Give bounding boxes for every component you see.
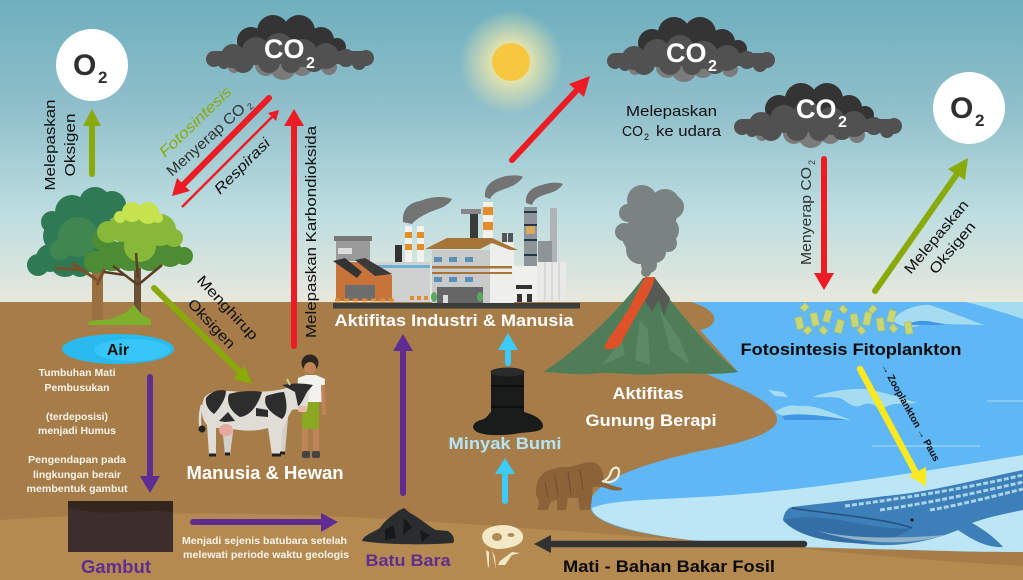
label: melepaskan oksigen left: Melepaskan — [43, 100, 59, 190]
label: respirasi: Respirasi — [212, 135, 274, 198]
label: menyerap CO2: 2 — [245, 101, 256, 112]
cloud CO2 right: CO — [796, 94, 836, 124]
coal pile — [362, 508, 454, 544]
arrow: oxygen up left — [83, 109, 101, 174]
lower ground layer — [0, 514, 1023, 580]
arrow: menyerap CO2 to sea — [814, 159, 834, 290]
ice floes — [768, 302, 1023, 420]
sun — [459, 10, 563, 114]
arrow: oil to industry — [498, 333, 518, 363]
O2 circle left: 2 — [98, 68, 107, 87]
person — [297, 354, 325, 458]
peat block — [68, 501, 173, 552]
oil barrel with spill — [473, 368, 543, 435]
trees — [27, 187, 193, 325]
text: decomposition stages: menjadi Humus — [38, 425, 116, 437]
cloud CO2 left: 2 — [306, 55, 315, 72]
arrow: yellow food chain — [860, 369, 926, 486]
arrow: menyerap CO2 — [172, 98, 269, 196]
O2 circle left — [56, 29, 128, 101]
water pond: Air — [107, 342, 129, 359]
arrow: respirasi — [182, 110, 279, 207]
smoke — [615, 185, 684, 277]
text: geological time: melewati periode waktu geologis — [183, 549, 349, 561]
cow — [198, 379, 313, 455]
water pond — [62, 334, 174, 364]
label: fotosintesis fitoplankton: Fotosintesis Fitoplankton — [740, 340, 962, 359]
O2 circle right — [933, 72, 1005, 144]
ground — [0, 302, 1023, 580]
dark soil wedge — [790, 547, 1023, 566]
label: menghirup oksigen — [184, 273, 261, 352]
label: menghirup oksigen: Oksigen — [184, 296, 238, 352]
arrow: purple down to gambut — [140, 377, 160, 493]
label: fotosintesis: Fotosintesis — [156, 83, 236, 161]
cloud CO2 middle — [607, 17, 775, 82]
label: manusia dan hewan: Manusia & Hewan — [186, 463, 344, 483]
label: melepaskan CO2 ke udara — [622, 104, 722, 142]
text: decomposition stages: Pengendapan pada — [28, 454, 126, 466]
cloud CO2 right — [734, 83, 902, 148]
arrow: purple gambut to coal — [193, 513, 338, 532]
phytoplankton — [795, 303, 913, 335]
O2 circle left: O — [73, 49, 96, 82]
label: zooplankton paus: → Zooplankton → Paus — [878, 362, 942, 464]
arrow: menghirup oksigen — [154, 288, 252, 384]
mammoth — [536, 462, 622, 510]
text: decomposition stages: membentuk gambut — [26, 483, 128, 495]
arrow: industry to cloud — [512, 76, 590, 160]
label: batu bara: Batu Bara — [366, 551, 451, 570]
text: geological time: Menjadi sejenis batubara setelah — [182, 535, 347, 547]
label: melepaskan CO2 ke udara: CO — [622, 124, 643, 140]
arrow: fossil to oil — [495, 458, 515, 501]
label: menyerap CO2 right: 2 — [807, 160, 817, 165]
cloud CO2 middle: 2 — [708, 58, 717, 75]
label: gambut: Gambut — [81, 557, 151, 577]
text: decomposition stages — [26, 367, 128, 495]
label: melepaskan karbondioksida: Melepaskan Karbondioksida — [304, 125, 320, 338]
whale — [783, 470, 1023, 547]
arrow: coal to industry — [393, 334, 413, 493]
fossil — [482, 525, 523, 569]
label: mati bahan bakar fosil: Mati - Bahan Bakar Fosil — [563, 557, 775, 576]
text: decomposition stages: Pembusukan — [44, 382, 110, 394]
label: melepaskan oksigen right: Oksigen — [927, 219, 979, 278]
label: melepaskan CO2 ke udara: ke udara — [656, 124, 722, 140]
label: melepaskan oksigen left — [43, 100, 79, 190]
smoke — [403, 175, 563, 224]
cloud CO2 left — [206, 15, 374, 80]
label: minyak bumi: Minyak Bumi — [448, 434, 562, 453]
cloud CO2 right: 2 — [838, 114, 847, 131]
cloud CO2 left: CO — [264, 34, 304, 64]
label: aktifitas gunung berapi: Gunung Berapi — [586, 411, 716, 430]
text: decomposition stages: lingkungan berair — [33, 469, 121, 481]
label: aktifitas industri: Aktifitas Industri & Manusia — [334, 311, 574, 330]
text: decomposition stages: (terdeposisi) — [46, 411, 108, 423]
label: melepaskan oksigen right: Melepaskan — [902, 197, 972, 277]
arrow: oxygen from sea — [875, 158, 968, 291]
volcano — [543, 185, 738, 374]
O2 circle right: 2 — [975, 111, 984, 130]
O2 circle right: O — [950, 92, 973, 125]
label: menghirup oksigen: Menghirup — [193, 273, 261, 344]
text: decomposition stages: Tumbuhan Mati — [38, 367, 116, 379]
panel: sea — [590, 302, 1023, 553]
text: geological time — [182, 535, 349, 561]
label: aktifitas gunung berapi — [586, 384, 716, 430]
label: melepaskan CO2 ke udara: 2 — [644, 132, 649, 142]
sky background — [0, 0, 1023, 303]
label: menyerap CO2 right: Menyerap CO — [799, 167, 815, 265]
arrow: karbondioksida — [284, 109, 304, 346]
cloud CO2 middle: CO — [666, 38, 706, 68]
arrow: dead to fossil fuel — [534, 535, 804, 553]
waterline highlights — [872, 401, 1023, 446]
factory — [333, 175, 580, 308]
label: aktifitas gunung berapi: Aktifitas — [612, 384, 684, 403]
label: melepaskan CO2 ke udara: Melepaskan — [626, 104, 717, 120]
label: melepaskan oksigen left: Oksigen — [63, 114, 79, 176]
label: menyerap CO2: Menyerap CO — [163, 100, 249, 180]
